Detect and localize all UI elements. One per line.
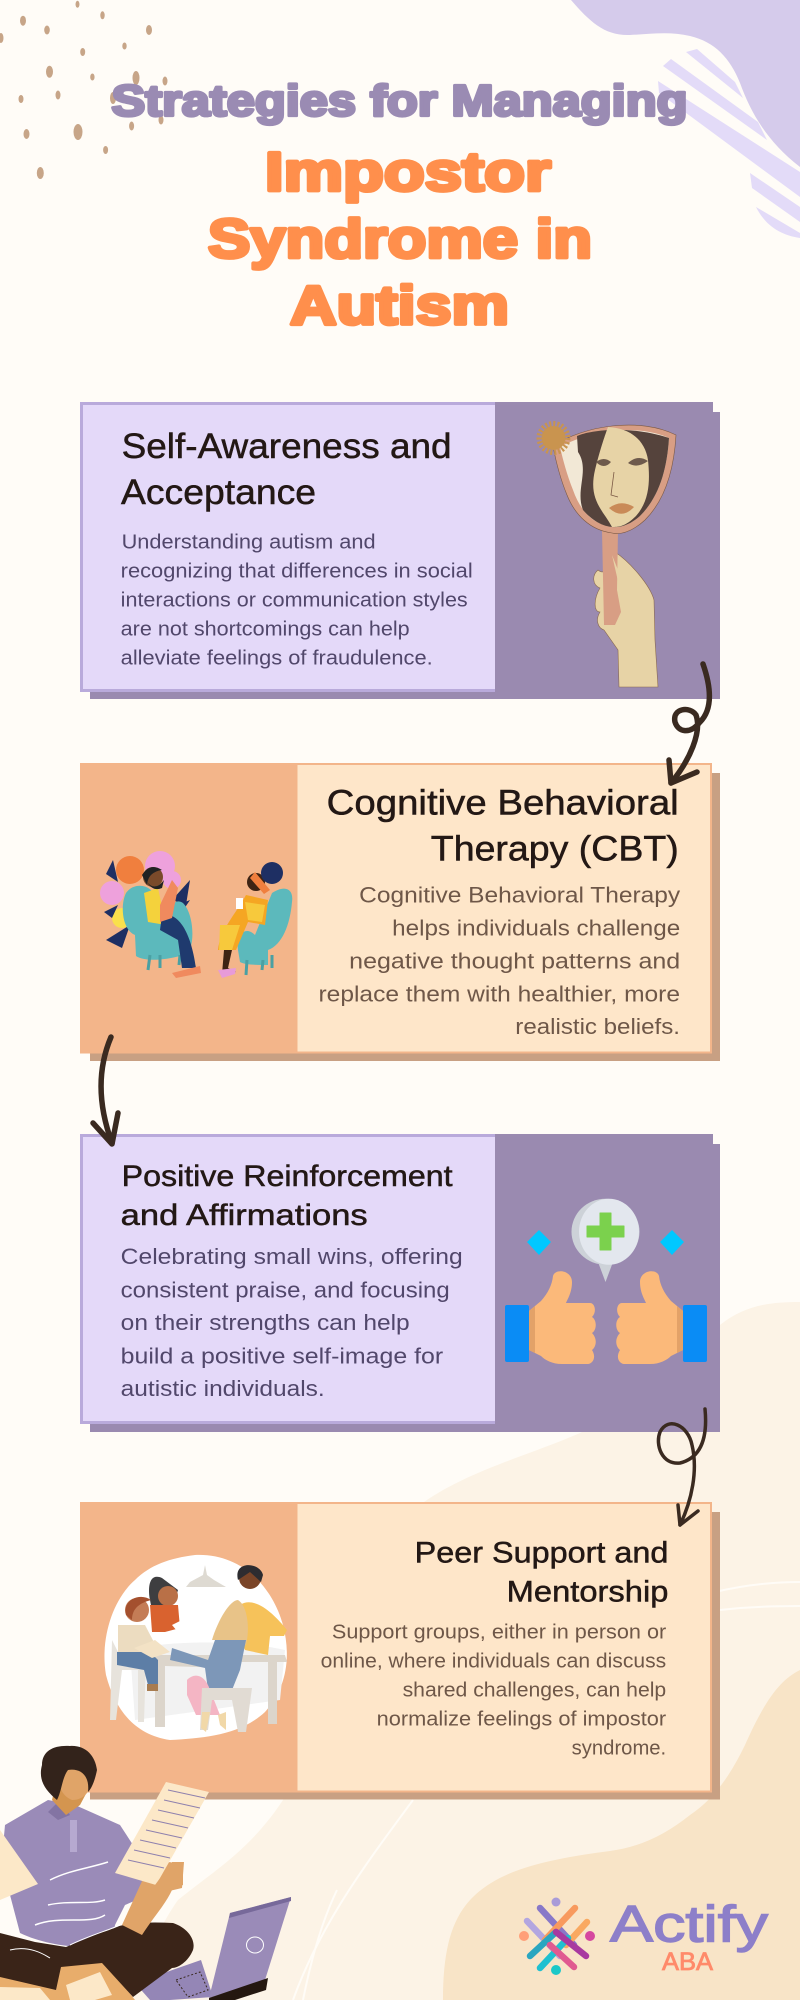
icon: thumbs up with plus bubble: [505, 1199, 707, 1364]
heading: positive reinforcement: [121, 1160, 453, 1232]
body text: CBT: helps individuals challenge: [392, 915, 680, 940]
arrow: card 1 to card 2: [669, 664, 709, 783]
arm: [122, 1862, 183, 1935]
body text: CBT: realistic beliefs.: [515, 1014, 680, 1039]
legs: [0, 1923, 194, 1997]
neck and head: [52, 1775, 88, 1815]
body text: positive reinforcement: Celebrating small wins, offering: [121, 1244, 463, 1269]
title line: subtitle: Strategies for Managing: [112, 76, 688, 126]
decorative speckle dots, top left: [0, 1, 168, 179]
illustration: person reading with laptop: [0, 1746, 291, 2000]
laptop: [135, 1897, 291, 2000]
panel: cognitive behavioral therapy: [80, 763, 720, 1061]
heading: self-awareness: Self-Awareness and: [122, 427, 452, 466]
body text: positive reinforcement: autistic individuals.: [121, 1376, 325, 1401]
body text: CBT: negative thought patterns and: [349, 948, 680, 973]
arrow: card 2 to card 3: [93, 1037, 118, 1144]
body text: peer support: normalize feelings of impostor: [377, 1709, 667, 1731]
paper left: [0, 1830, 38, 1900]
heading: positive reinforcement: Positive Reinforcement: [122, 1160, 453, 1193]
illustration: group at table: [104, 1555, 287, 1740]
feet and socks: [0, 1958, 135, 2000]
body text: CBT: Cognitive Behavioral Therapy: [359, 883, 680, 908]
illustration: therapy session: [100, 851, 292, 978]
logo mark: [519, 1898, 595, 1975]
shirt: [0, 1800, 148, 1947]
paper right: [115, 1782, 209, 1885]
title line: Impostor: Impostor: [265, 140, 551, 202]
body text: peer support: [321, 1621, 667, 1759]
arrow: card 3 to card 4: [658, 1409, 706, 1525]
body text: self-awareness: recognizing that differences in social: [121, 561, 473, 583]
hair: [41, 1746, 97, 1800]
heading: self-awareness: Acceptance: [121, 473, 316, 512]
panel: self-awareness: [80, 402, 720, 699]
logo: Actify ABA: [519, 1896, 769, 1976]
body text: self-awareness: interactions or communication styles: [121, 590, 468, 612]
logo subtitle: ABA: [662, 1948, 713, 1976]
hand on paper: [155, 1862, 184, 1892]
body text: peer support: syndrome.: [572, 1737, 666, 1759]
body text: positive reinforcement: on their strengths can help: [121, 1310, 410, 1335]
heading: peer support: Mentorship: [507, 1576, 668, 1609]
body text: self-awareness: [121, 531, 473, 669]
body text: peer support: Support groups, either in person or: [332, 1621, 667, 1643]
heading: peer support: Peer Support and: [415, 1537, 668, 1570]
icon: hand mirror: [539, 424, 676, 687]
heading: CBT: [327, 783, 679, 869]
body text: self-awareness: are not shortcomings can help: [121, 619, 410, 641]
body text: peer support: shared challenges, can help: [403, 1680, 666, 1702]
heading: CBT: Therapy (CBT): [431, 830, 679, 869]
heading: peer support: [415, 1537, 668, 1609]
background curved white lines: [293, 1582, 800, 2000]
body text: self-awareness: Understanding autism and: [122, 531, 376, 553]
heading: positive reinforcement: and Affirmations: [121, 1199, 368, 1232]
decorative stripes, top right: [658, 49, 800, 238]
body text: positive reinforcement: [121, 1244, 463, 1401]
heading: self-awareness: [121, 427, 452, 512]
background blob: light beige: [130, 1302, 800, 2000]
title line: Syndrome in: Syndrome in: [208, 208, 592, 270]
logo wordmark: Actify: [610, 1896, 769, 1953]
body text: positive reinforcement: consistent praise, and focusing: [121, 1278, 450, 1303]
heading: CBT: Cognitive Behavioral: [327, 783, 679, 822]
title: [112, 76, 688, 336]
decorative lavender blob, top right: [571, 0, 800, 167]
body text: CBT: replace them with healthier, more: [318, 981, 680, 1006]
panel: peer support: [80, 1502, 720, 1800]
background blob: darker beige: [443, 1670, 800, 2000]
title line: Autism: Autism: [290, 274, 509, 336]
panel: positive reinforcement: [80, 1134, 720, 1432]
body text: peer support: online, where individuals can discuss: [321, 1650, 666, 1672]
body text: self-awareness: alleviate feelings of fraudulence.: [121, 647, 433, 669]
body text: positive reinforcement: build a positive self-image for: [121, 1343, 443, 1368]
body text: CBT: [318, 883, 680, 1039]
